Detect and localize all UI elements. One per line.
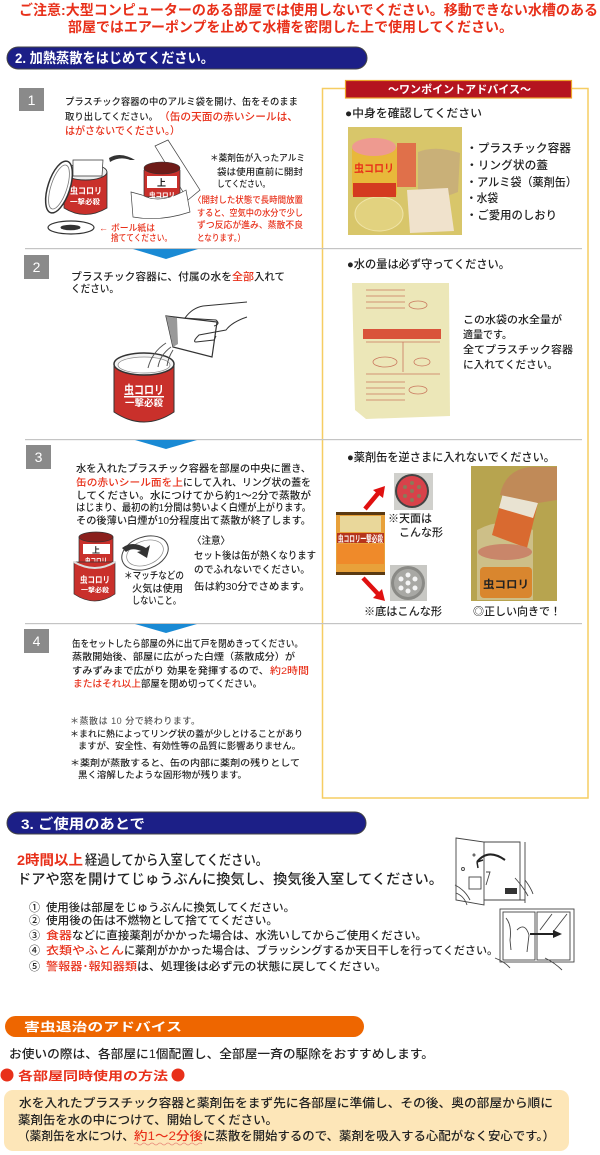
after-use numbered list: に薬剤がかかった場合は、ブラッシングするか天日干しを行ってください。 bbox=[124, 943, 498, 957]
step 3 text bbox=[76, 462, 311, 527]
heading: section 2: 2. 加熱蒸散をはじめてください。 bbox=[15, 50, 214, 66]
water bag text: 全てプラスチック容器 bbox=[463, 343, 574, 356]
caption: correct direction: ◎正しい向きで！ bbox=[473, 604, 561, 618]
photo: package contents bbox=[348, 127, 462, 235]
open container with lid bbox=[40, 158, 107, 216]
list: package contents: ・リング状の蓋 bbox=[466, 158, 548, 172]
note: caution hot can bbox=[192, 534, 316, 593]
step 4 text: 約2時間 bbox=[270, 665, 309, 677]
illustration: can set in container: 虫コロリ bbox=[80, 574, 110, 585]
caption: top side bbox=[388, 512, 443, 539]
step 4 notes: 黒く溶解したような固形物が残ります。 bbox=[78, 769, 247, 780]
photo: can top bbox=[394, 473, 433, 510]
can: 虫コロリ bbox=[124, 382, 164, 397]
after-use lead text bbox=[17, 852, 443, 887]
step 3 badge: 3 bbox=[35, 449, 43, 465]
step 4 text: 蒸散開始後、部屋に広がった白煙（蒸散成分）が bbox=[72, 651, 296, 663]
list: package contents: ・水袋 bbox=[466, 191, 498, 205]
note: red warning: すると、空気中の水分で少し bbox=[197, 207, 303, 218]
can bbox=[114, 353, 174, 422]
panel: method box: 薬剤缶を水の中につけて、開始してください。 bbox=[18, 1112, 278, 1127]
illustration: open door bbox=[455, 838, 533, 905]
after-use numbered list: ② bbox=[29, 914, 40, 927]
can: 一撃必殺 bbox=[125, 397, 163, 408]
step 4 notes bbox=[70, 715, 303, 780]
after-use numbered list: 食器 bbox=[46, 928, 72, 942]
title: warning about computers and aquariums: 部屋ではエアーポンプを止めて水槽を密閉した上で使用してください。 bbox=[68, 19, 513, 35]
photo: drug can: 虫コロリ一撃必殺 bbox=[338, 533, 383, 544]
note: red warning: 〈開封した状態で長時間放置 bbox=[193, 194, 303, 205]
step 2 text: プラスチック容器に、付属の水を bbox=[71, 270, 232, 283]
step 4 text: すみずみまで広がり 効果を発揮するので、 bbox=[72, 665, 269, 677]
curved arrow bbox=[122, 544, 150, 558]
step 4 text bbox=[72, 638, 309, 690]
step 1 text: 取り出してください。 bbox=[65, 111, 158, 123]
step dividers bbox=[25, 248, 582, 624]
step 2 text bbox=[71, 270, 285, 295]
pouch bbox=[166, 316, 217, 357]
step 4 badge: 4 bbox=[33, 633, 41, 649]
advice header bbox=[346, 80, 572, 98]
after-use numbered list: 衣類やふとん bbox=[46, 943, 124, 957]
illustration: can set in container: 一撃必殺 bbox=[81, 585, 110, 594]
note: caution hot can: セット後は缶が熱くなります bbox=[194, 549, 316, 562]
illustration: can set in container: 上 bbox=[92, 545, 100, 555]
note: red warning: ずつ反応が進み、蒸散不良 bbox=[197, 219, 303, 230]
photo: water bag bbox=[352, 283, 450, 419]
step 3 text: はじまり、最初の約1分間は勢いよく白煙が上がります。 bbox=[76, 501, 311, 514]
step 4 text: 缶をセットしたら部屋の外に出て戸を閉めきってください。 bbox=[72, 638, 303, 650]
water bag text: に入れてください。 bbox=[463, 359, 558, 371]
illustration: can set in container: 虫コロリ bbox=[85, 556, 107, 565]
subheading: simultaneous use: 各部屋同時使用の方法 bbox=[18, 1068, 168, 1083]
step 4 notes: ＊まれに熱によってリング状の蓋が少しとけることがあり bbox=[70, 728, 303, 739]
step 3 text: その後薄い白煙が10分程度出て蒸散が終了します。 bbox=[76, 514, 311, 527]
heading: pest control advice: 害虫退治のアドバイス bbox=[24, 1019, 182, 1034]
water stream bbox=[148, 343, 173, 368]
step 1 text: プラスチック容器の中のアルミ袋を開け、缶をそのまま bbox=[65, 96, 298, 108]
step 3 text: にして入れ、リング状の蓋を bbox=[183, 476, 311, 489]
open container with lid: 一撃必殺 bbox=[70, 197, 100, 206]
step 2 text: 入れて bbox=[254, 271, 285, 283]
photo: can bottom bbox=[390, 565, 427, 601]
step 4 text: 部屋を閉め切ってください。 bbox=[141, 678, 262, 690]
step 3 text: 水を入れたプラスチック容器を部屋の中央に置き、 bbox=[76, 462, 311, 475]
photo: drug can bbox=[336, 512, 385, 575]
note: no open flame: ＊マッチなどの bbox=[124, 570, 184, 582]
advice 2 heading: ●水の量は必ず守ってください。 bbox=[347, 257, 510, 271]
after-use lead text: ドアや窓を開けてじゅうぶんに換気し、換気後入室してください。 bbox=[17, 871, 443, 887]
panel: method box: 約1～2分後 bbox=[134, 1128, 203, 1143]
note: caution hot can: 〈注意〉 bbox=[192, 534, 230, 547]
title: warning about computers and aquariums bbox=[19, 2, 598, 35]
after-use lead text: 2時間以上 bbox=[17, 852, 83, 868]
note: foil pouch: ＊薬剤缶が入ったアルミ bbox=[210, 152, 305, 163]
after-use numbered list: ④ bbox=[29, 944, 40, 957]
panel: one point advice bbox=[322, 80, 588, 798]
hand bbox=[183, 302, 247, 342]
note: foil pouch: 袋は使用直前に開封 bbox=[217, 166, 303, 177]
note: no open flame: 火気は使用 bbox=[132, 582, 183, 595]
panel: method box: 水を入れたプラスチック容器と薬剤缶をまず先に各部屋に準備し、その後、奥の部屋から順に bbox=[19, 1095, 553, 1110]
heading: pest control advice bbox=[5, 1016, 364, 1037]
list: package contents: ・ご愛用のしおり bbox=[466, 208, 557, 222]
illustration: open window bbox=[495, 909, 574, 970]
can and foil pouch: 虫コロリ bbox=[149, 190, 175, 199]
step 3 text: してください。水につけてから約1～2分で蒸散が bbox=[76, 489, 311, 502]
list: package contents bbox=[466, 141, 577, 222]
step 2 badge: 2 bbox=[33, 259, 41, 275]
step 1 text: （缶の天面の赤いシールは、 bbox=[159, 110, 298, 123]
step 3 badge bbox=[26, 445, 51, 469]
after-use numbered list: ① bbox=[29, 901, 40, 914]
illustration: pouring water into can bbox=[114, 302, 247, 422]
note: red warning bbox=[193, 194, 303, 243]
advice 1 heading: ●中身を確認してください bbox=[345, 106, 482, 120]
step 1 badge bbox=[19, 88, 44, 111]
caption: top side: ※天面は bbox=[388, 512, 432, 525]
can and foil pouch: 上 bbox=[157, 177, 166, 188]
panel: method box bbox=[4, 1090, 569, 1151]
after-use numbered list: ⑤ bbox=[29, 960, 40, 973]
step 1 text: はがさないでください。） bbox=[65, 124, 180, 137]
panel: method box: に蒸散を開始するので、薬剤を吸入する心配がなく安心です。） bbox=[203, 1128, 555, 1143]
after-use numbered list: ③ bbox=[29, 929, 40, 942]
caption: top side: こんな形 bbox=[399, 526, 443, 539]
list: package contents: ・プラスチック容器 bbox=[466, 141, 571, 155]
illustration: can set in container bbox=[74, 530, 173, 601]
step 1 badge: 1 bbox=[28, 92, 36, 108]
ring lid bbox=[117, 530, 173, 576]
panel: method box: （薬剤缶を水につけ、 bbox=[18, 1128, 134, 1143]
after-use numbered list: 使用後は部屋をじゅうぶんに換気してください。 bbox=[46, 900, 295, 914]
disc note bbox=[99, 222, 172, 243]
note: caution hot can: のでふれないでください。 bbox=[194, 564, 310, 576]
after-use lead text: 経過してから入室してください。 bbox=[85, 852, 268, 868]
step 4 notes: ＊薬剤が蒸散すると、缶の内部に薬剤の残りとして bbox=[70, 757, 300, 768]
heading: section 2 bbox=[7, 47, 367, 69]
after-use numbered list: などに直接薬剤がかかった場合は、水洗いしてからご使用ください。 bbox=[72, 928, 427, 942]
caption: bottom side: ※底はこんな形 bbox=[364, 604, 442, 618]
note: red warning: となります。） bbox=[197, 233, 245, 243]
disc note: 捨ててください。 bbox=[111, 232, 172, 243]
heading: section 3 bbox=[7, 812, 366, 834]
after-use numbered list: 警報器･報知器類 bbox=[46, 959, 137, 973]
title: warning about computers and aquariums: ご注意:大型コンピューターのある部屋では使用しないでください。移動できない水槽のある bbox=[19, 2, 598, 18]
step 4 notes: ますが、安全性、有効性等の品質に影響ありません。 bbox=[78, 740, 301, 751]
step 2 badge bbox=[24, 255, 49, 279]
disc note: ボール紙は bbox=[111, 222, 155, 233]
can and foil pouch bbox=[131, 140, 200, 219]
step 4 badge bbox=[24, 629, 49, 653]
water bag text: この水袋の水全量が bbox=[463, 313, 563, 326]
advice lead text: お使いの際は、各部屋に1個配置し、全部屋一斉の駆除をおすすめします。 bbox=[9, 1046, 434, 1061]
list: package contents: ・アルミ袋（薬剤缶） bbox=[466, 175, 577, 189]
step 4 notes: ＊蒸散は 10 分で終わります。 bbox=[70, 715, 200, 726]
note: caution hot can: 缶は約30分でさめます。 bbox=[194, 580, 310, 593]
open container with lid: 虫コロリ bbox=[70, 185, 102, 196]
water bag text: 適量です。 bbox=[463, 328, 512, 341]
water bag text bbox=[463, 313, 574, 371]
curved arrow bbox=[109, 155, 135, 162]
note: no open flame bbox=[124, 570, 184, 607]
photo: package contents: 虫コロリ bbox=[354, 161, 394, 175]
step 3 text: 缶の赤いシール面を上 bbox=[76, 476, 183, 489]
after-use numbered list: は、処理後は必ず元の状態に戻してください。 bbox=[137, 959, 387, 973]
cardboard disc bbox=[48, 221, 94, 234]
advice 3 heading: ●薬剤缶を逆さまに入れないでください。 bbox=[347, 450, 555, 464]
note: no open flame: しないこと。 bbox=[132, 595, 181, 607]
photo: correct direction: 虫コロリ bbox=[483, 577, 529, 591]
after-use numbered list: 使用後の缶は不燃物として捨ててください。 bbox=[46, 913, 278, 927]
step 1 text bbox=[65, 96, 298, 137]
note: foil pouch: してください。 bbox=[217, 179, 270, 189]
illustration: opening the can bbox=[40, 140, 200, 234]
step 4 text: またはそれ以上 bbox=[73, 679, 141, 690]
subheading: simultaneous use bbox=[0, 1068, 184, 1083]
arrows: red up and down bbox=[363, 486, 385, 601]
note: foil pouch bbox=[210, 152, 305, 189]
arrows: blue step triangles bbox=[133, 249, 198, 633]
step 2 text: 全部 bbox=[232, 270, 255, 283]
step 2 text: ください。 bbox=[71, 283, 119, 295]
photo: correct direction bbox=[471, 466, 557, 601]
heading: section 3: 3. ご使用のあとで bbox=[21, 816, 145, 832]
advice header: ～ワンポイントアドバイス～ bbox=[388, 83, 531, 96]
disc note: ← bbox=[99, 223, 108, 233]
after-use numbered list bbox=[29, 900, 498, 973]
